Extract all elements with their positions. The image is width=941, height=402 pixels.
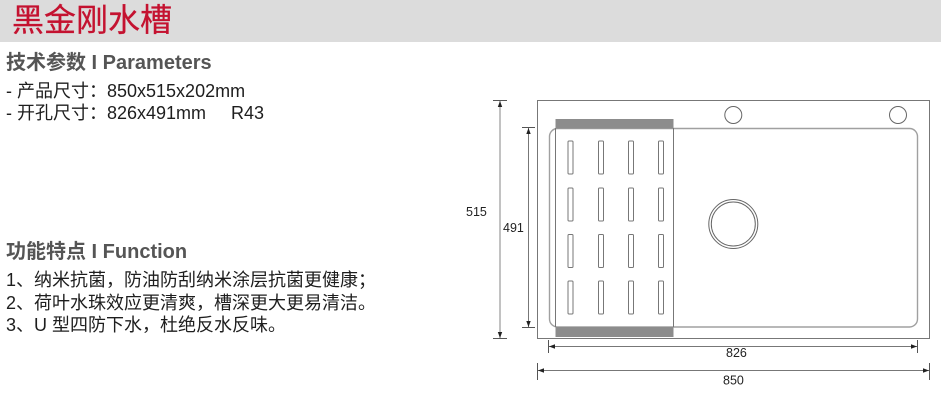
cutout size: - 开孔尺寸：826x491mm R43: [6, 103, 264, 123]
heading: parameters: 技术参数 I Parameters: [6, 52, 212, 74]
drain: [709, 200, 758, 248]
header bar: [0, 0, 941, 42]
drainboard grate: [556, 119, 674, 337]
dimension: width 826: 826: [726, 346, 747, 360]
dimension: height 515: 515: [466, 205, 487, 219]
dimension: height 491: [503, 128, 535, 328]
dimension: width 850: 850: [723, 374, 744, 388]
feature 3: 3、U 型四防下水，杜绝反水反味。: [6, 315, 286, 335]
feature 1: 1、纳米抗菌，防油防刮纳米涂层抗菌更健康；: [6, 270, 376, 290]
faucet hole left: [725, 106, 742, 124]
dimension: height 515: [466, 100, 507, 338]
faucet hole right: [890, 106, 906, 124]
title: 黑金刚水槽: [12, 2, 172, 38]
dimension: width 850: [538, 363, 930, 388]
heading: function: 功能特点 I Function: [6, 241, 187, 263]
text block: parameters: [6, 81, 264, 123]
dimension: height 491: 491: [503, 221, 524, 235]
sink outer outline: [538, 100, 930, 338]
dimension: width 826: [548, 340, 918, 360]
grate slots: [568, 141, 664, 314]
sink basin: [550, 128, 918, 327]
grate bottom band: [556, 327, 674, 337]
feature 2: 2、荷叶水珠效应更清爽，槽深更大更易清洁。: [6, 293, 376, 313]
product size: - 产品尺寸：850x515x202mm: [6, 81, 245, 101]
grate top band: [556, 119, 674, 128]
text block: function: [6, 270, 376, 335]
